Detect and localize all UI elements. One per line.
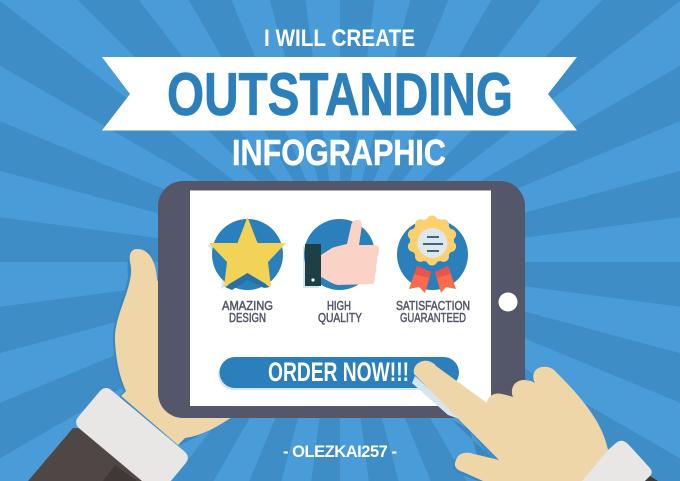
label: high quality	[318, 299, 363, 325]
tablet	[158, 181, 525, 418]
order button	[218, 357, 459, 390]
label: satisfaction guaranteed: GUARANTEED	[400, 311, 466, 325]
heading: I will create: I WILL CREATE	[264, 25, 415, 52]
sleeve fold	[103, 465, 137, 481]
hand shadow	[113, 250, 230, 445]
label: high quality: QUALITY	[318, 311, 363, 325]
icon: star	[207, 217, 286, 290]
sleeve	[645, 476, 658, 481]
shirt cuff	[76, 388, 188, 481]
button label: ORDER NOW!!!	[268, 357, 409, 387]
left hand holding tablet	[28, 249, 232, 481]
icon: award badge	[397, 216, 468, 293]
label: amazing design	[222, 299, 273, 325]
heading: infographic: INFOGRAPHIC	[232, 132, 446, 173]
tablet home button	[498, 292, 518, 312]
label: amazing design: DESIGN	[229, 311, 266, 325]
label: amazing design: AMAZING	[222, 299, 273, 313]
heading: outstanding: OUTSTANDING	[167, 61, 513, 128]
hand shadow	[451, 419, 496, 481]
hand	[115, 249, 232, 445]
tablet body	[158, 181, 525, 418]
footer credit: - OLEZKAI257 -	[283, 443, 397, 461]
icon: thumbs up	[303, 219, 379, 290]
ribbon banner	[102, 57, 577, 130]
hand	[414, 361, 608, 481]
label: satisfaction guaranteed	[396, 299, 470, 325]
shirt cuff	[582, 441, 652, 481]
scalloped seal	[408, 216, 456, 266]
right hand pointing	[412, 361, 658, 481]
label: high quality: HIGH	[327, 299, 351, 313]
label: satisfaction guaranteed: SATISFACTION	[396, 299, 470, 313]
finger shadow on screen	[412, 376, 462, 420]
ribbon tails	[409, 266, 431, 293]
sleeve	[28, 428, 150, 481]
jacket cuff	[305, 244, 321, 286]
tablet screen	[190, 190, 491, 406]
